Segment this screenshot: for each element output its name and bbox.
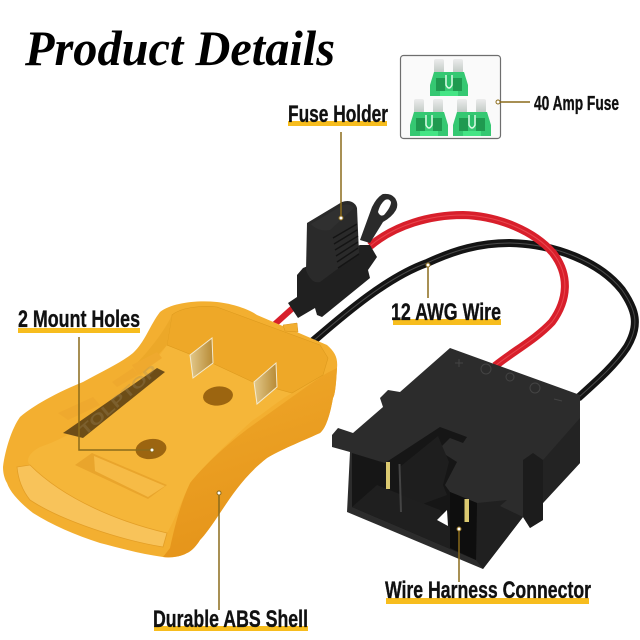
red stub: [275, 306, 295, 324]
yellow ABS shell: [3, 301, 337, 557]
black wire: [312, 243, 635, 398]
left pin: [386, 462, 390, 489]
fuse bottom right: [453, 99, 491, 136]
rear inner wall: [167, 306, 328, 393]
fuse box: [400, 56, 500, 138]
side clip tabs: [58, 352, 162, 420]
fuse bottom left: [410, 99, 448, 136]
cap top face: [311, 204, 354, 230]
shell outer body: [3, 301, 337, 557]
opening: [437, 510, 448, 526]
connector body: [332, 348, 580, 569]
label: fuse holder: Fuse Holder: [288, 101, 388, 128]
leader: fuse holder: [339, 132, 343, 220]
fuse holder: [275, 194, 397, 324]
fuse top: [430, 59, 468, 96]
shell front side wall: [163, 368, 337, 557]
floor: [352, 485, 476, 560]
metal terminal right: [254, 363, 277, 404]
left inner wall: [135, 315, 172, 375]
divider wall: [401, 436, 449, 512]
watermark: TOLPTOP: [76, 362, 162, 439]
front lip: [17, 465, 167, 547]
fuse box frame: [400, 56, 500, 138]
right pin: [464, 499, 469, 522]
metal terminal left: [190, 338, 213, 378]
leader: ABS shell: [217, 491, 221, 610]
label: mount holes: 2 Mount Holes: [18, 306, 140, 333]
leader: 40 amp fuse: [496, 100, 530, 104]
right compartment: [450, 492, 477, 560]
connector markings: [455, 359, 562, 401]
base: [288, 245, 377, 318]
left cavity: [352, 427, 477, 560]
leader: 12 AWG wire: [426, 263, 430, 298]
leader: harness connector: [457, 527, 461, 582]
right pillar: [523, 453, 543, 528]
red wire: [370, 215, 565, 366]
wire harness connector: [332, 348, 580, 569]
side clip slot: [63, 368, 165, 438]
mount hole front: [134, 437, 168, 461]
mount hole rear: [202, 385, 234, 407]
divider edge: [400, 464, 401, 512]
leader: mount holes: [79, 337, 154, 452]
shell floor: [28, 345, 292, 533]
right side face: [543, 418, 580, 503]
square recess inner: [94, 456, 165, 497]
strap loop: [360, 194, 397, 243]
front side face: [476, 500, 523, 569]
label: ABS shell: Durable ABS Shell: [153, 606, 308, 633]
small tab: [283, 323, 298, 332]
cap: [306, 201, 359, 282]
cap ribs: [333, 224, 359, 268]
title: Product Details: [24, 20, 335, 76]
label: 12 AWG wire: 12 AWG Wire: [391, 299, 501, 326]
square recess: [75, 453, 167, 499]
